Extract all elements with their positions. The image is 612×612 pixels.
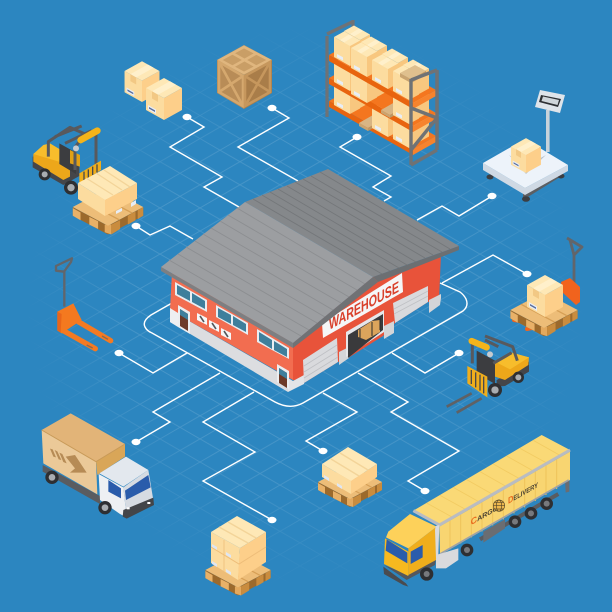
isometric floor grid — [55, 56, 554, 556]
side doors — [178, 305, 289, 389]
loading dock — [346, 310, 384, 358]
cargo box — [42, 413, 125, 494]
trailer lettering — [471, 479, 538, 528]
chassis — [43, 465, 100, 504]
scale platform — [488, 170, 563, 200]
forklift wheels — [39, 168, 78, 195]
wall signs — [197, 313, 231, 340]
box stack on forklift — [78, 166, 137, 216]
mast — [467, 366, 487, 397]
pallet racking shelf — [327, 20, 437, 165]
pallet — [510, 292, 578, 336]
trailer globe logo — [493, 500, 505, 511]
jack handle — [567, 238, 582, 285]
jack body — [561, 278, 580, 305]
fuel tank — [436, 548, 458, 568]
forklift body right — [472, 336, 529, 387]
forklift mast — [79, 161, 101, 184]
pallet truck, left — [56, 258, 111, 349]
forklift, right — [447, 336, 529, 413]
connector dots — [114, 105, 532, 523]
cardboard boxes pair — [125, 61, 182, 120]
truck cab — [383, 514, 439, 587]
box on jack — [527, 275, 563, 317]
side wall — [170, 272, 293, 380]
forks — [63, 322, 111, 349]
forks — [447, 393, 482, 413]
truck wheels rear — [461, 497, 553, 556]
platform scale with box — [483, 90, 568, 202]
cargo arrow mark — [50, 449, 87, 473]
pallet truck with box, right — [510, 238, 582, 336]
front wall — [293, 254, 441, 383]
top row boxes — [334, 26, 429, 100]
middle shelf — [329, 65, 436, 132]
roller door right — [393, 286, 428, 323]
trailer lettering: DELIVERY — [508, 479, 538, 507]
roof right section — [245, 169, 459, 282]
bottom row boxes — [334, 74, 429, 148]
concrete base — [170, 310, 288, 392]
small box truck — [42, 413, 154, 519]
corner plinths — [170, 294, 441, 392]
trailer undercarriage — [480, 477, 569, 543]
trailer — [413, 435, 570, 555]
connector lines — [119, 108, 527, 520]
warehouse sign — [322, 273, 403, 338]
middle row boxes — [334, 50, 429, 124]
wheels — [488, 372, 524, 397]
cab — [99, 457, 154, 519]
pallet with flat boxes — [318, 447, 382, 507]
cargo semi truck — [383, 435, 570, 587]
warehouse sign: WAREHOUSE — [329, 278, 399, 334]
side windows — [175, 282, 289, 359]
truck wheels — [45, 471, 112, 514]
handle — [56, 258, 72, 307]
top shelf — [329, 42, 436, 109]
scale display — [535, 90, 565, 152]
warehouse building — [161, 169, 459, 392]
trailer lettering: CARGO — [471, 502, 498, 528]
shelf front frame — [411, 70, 437, 165]
shelf rear posts — [327, 20, 437, 150]
hydraulic body — [57, 303, 82, 333]
roof left section — [161, 202, 378, 348]
forklift with pallet, left — [33, 126, 143, 234]
forklift body — [33, 126, 97, 185]
bottom shelf — [329, 88, 436, 155]
roller door left — [303, 338, 338, 383]
pallet under boxes — [73, 188, 143, 234]
pallet with two-layer boxes — [205, 516, 271, 596]
fork tips — [514, 320, 532, 329]
wooden crate — [217, 45, 272, 109]
